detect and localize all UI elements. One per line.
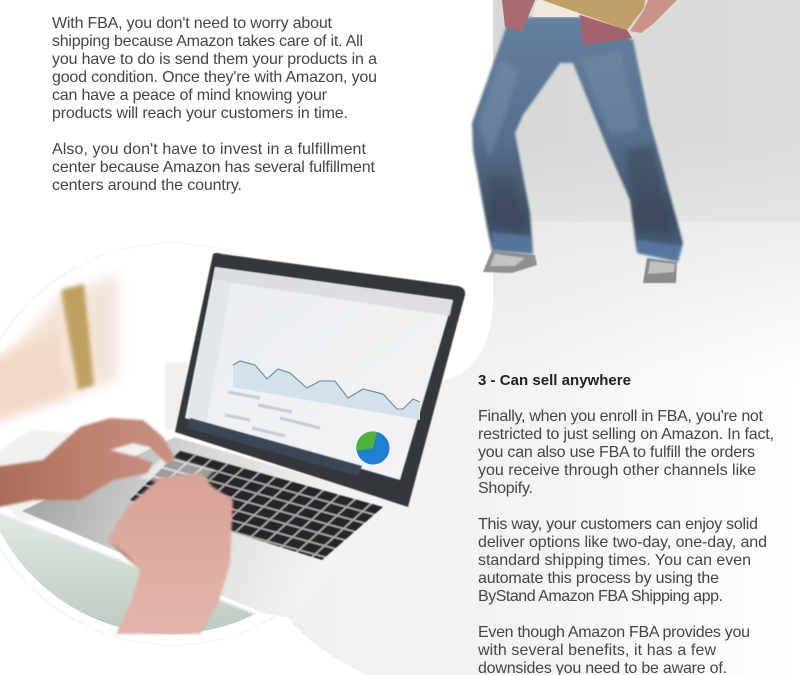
jeans [472,17,683,262]
photo: laptop in circle [0,240,465,650]
text block: sell anywhere details: standard shipping times. You can even [478,552,751,569]
right shoe [643,258,677,283]
text block: sell anywhere details: you receive through other channels like [478,462,756,479]
text block: sell anywhere details: with several benefits, it has a few [477,642,716,659]
display [185,267,453,480]
left shoe [483,250,537,273]
hand and forearm: left [0,418,175,508]
hand [630,0,677,33]
wall highlight [493,140,800,222]
text block: sell anywhere details: This way, your customers can enjoy solid [478,516,758,533]
dashboard sidebar [187,280,231,424]
text block: FBA shipping benefit: good condition. Once they're with Amazon, you [52,69,377,86]
text block: sell anywhere details: deliver options like two-day, one-day, and [478,534,767,551]
keyboard glare [140,455,215,492]
text block: FBA shipping benefit: centers around the country. [52,177,242,194]
floor shading [455,222,800,380]
text block: sell anywhere details: ByStand Amazon FBA Shipping app. [478,588,723,605]
panel: grey backdrop [285,222,800,675]
white ring [0,243,373,645]
text block: sell anywhere details: restricted to just selling on Amazon. In fact, [478,426,774,443]
photo: person carrying box [455,0,800,380]
plaid shirt right [580,15,632,45]
text block: sell anywhere details: you can also use FBA to fulfill the orders [478,444,755,461]
text block: sell anywhere details: Shopify. [478,480,533,497]
plaid shirt left [502,0,535,32]
text block: FBA shipping benefit: you have to do is send them your products in a [52,51,377,68]
heading: 3 - Can sell anywhere: 3 - Can sell anywhere [478,372,631,389]
text block: sell anywhere details [477,408,774,675]
hand and forearm: right [107,473,233,634]
cardboard box [542,0,645,30]
dashboard stat blocks [225,392,320,436]
text block: sell anywhere details: Finally, when you enroll in FBA, you're not [478,408,764,425]
screen lid [175,253,465,507]
text block: sell anywhere details: automate this process by using the [478,570,719,587]
browser toolbar [213,267,453,316]
text block: FBA shipping benefit: products will reach your customers in time. [52,105,348,122]
laptop base [22,437,409,617]
text block: FBA shipping benefit: can have a peace of mind knowing your [52,87,328,104]
text block: FBA shipping benefit: Also, you don't have to invest in a fulfillment [52,141,367,158]
keyboard [130,450,383,560]
pie chart [356,431,390,464]
text block: FBA shipping benefit [52,15,377,194]
taskbar [187,418,362,476]
wall [493,0,800,222]
text block: sell anywhere details: Even though Amazon FBA provides you [478,624,750,641]
circular photo background [0,274,256,634]
text block: FBA shipping benefit: shipping because Amazon takes care of it. All [52,33,363,50]
text block: FBA shipping benefit: With FBA, you don't need to worry about [52,15,333,32]
text block: FBA shipping benefit: center because Amazon has several fulfillment [52,159,376,176]
area chart [233,361,420,420]
t-shirt [532,0,580,17]
